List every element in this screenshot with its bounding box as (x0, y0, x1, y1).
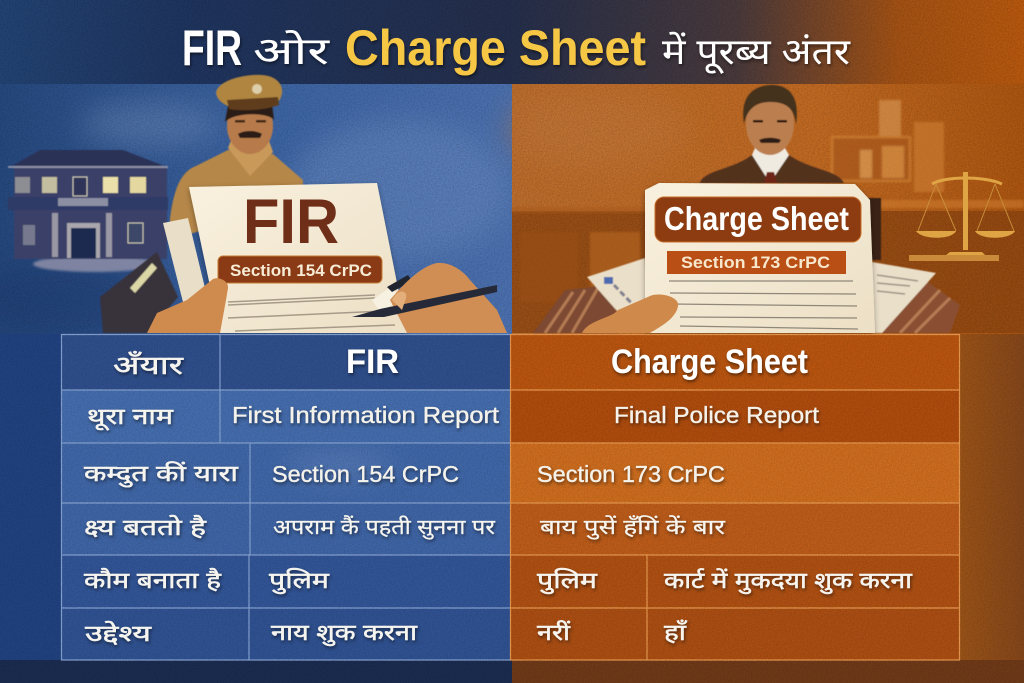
illustration: stacked files right (868, 198, 960, 333)
illustration: stacked files left (533, 258, 648, 333)
row: purpose: हाँ (664, 619, 687, 645)
heading: criteria: अँयार (113, 350, 185, 380)
row: who prepares (84, 567, 912, 595)
title: Charge Sheet (345, 20, 646, 76)
background texture (0, 0, 1024, 334)
row: when made: अपराम कैं पहती सुनना पर (273, 515, 495, 540)
section label Charge Sheet: Section 173 CrPC (681, 253, 830, 272)
row: legal section: Section 173 CrPC (537, 461, 725, 487)
section pill FIR: Section 154 CrPC (230, 261, 372, 280)
title: में पूरब्य अंतर (662, 31, 851, 74)
row: purpose (85, 619, 687, 647)
row: full name (87, 402, 820, 431)
document heading Charge Sheet: Charge Sheet (664, 200, 849, 237)
row: full name: थूरा नाम (87, 404, 174, 431)
row: purpose: नरीं (537, 620, 570, 645)
illustration: scales of justice (909, 172, 1015, 261)
illustration: advocate (700, 85, 844, 183)
row: legal section (84, 461, 725, 488)
section pill FIR (218, 256, 382, 283)
illustration: left hand FIR (147, 278, 228, 333)
document heading FIR: FIR (243, 187, 339, 257)
title band (0, 0, 1024, 84)
illustration: hand holding Charge Sheet (582, 294, 678, 333)
row: who prepares: पुलिम (537, 568, 598, 595)
illustration: police officer (170, 75, 303, 240)
row: legal section: Section 154 CrPC (272, 461, 459, 487)
comparison table: FIR column (61, 334, 510, 660)
row: who prepares: पुलिम (269, 568, 330, 595)
heading: Charge Sheet: Charge Sheet (611, 343, 808, 381)
illustration: Charge Sheet paper (645, 183, 875, 333)
row: purpose: उद्देश्य (85, 620, 153, 646)
illustration: device (100, 252, 178, 333)
table headings (113, 343, 808, 381)
heading: FIR: FIR (346, 343, 399, 381)
row: full name: First Information Report (232, 402, 500, 428)
row: legal section: कम्दुत कीं यारा (84, 461, 238, 488)
row: when made (84, 514, 725, 540)
title: ओर (253, 29, 331, 73)
panel: orange Charge Sheet background (510, 0, 1024, 683)
comparison table: Charge Sheet column (510, 334, 960, 660)
title (182, 20, 851, 76)
row: when made: बाय पुसें हँगिं कें बार (540, 515, 725, 540)
bottom strip (0, 660, 1024, 683)
table texture (0, 334, 1024, 683)
illustration: FIR paper (189, 183, 407, 333)
illustration: police building (8, 150, 168, 272)
illustration: back sheet FIR (163, 218, 205, 310)
panel: blue FIR background (0, 0, 512, 683)
illustration: background office shelves (512, 100, 1024, 302)
row: who prepares: कौम बनाता है (84, 567, 221, 593)
title: FIR (182, 20, 242, 76)
row: when made: क्ष्य बततो है (84, 514, 206, 540)
row: full name: Final Police Report (614, 402, 820, 428)
illustration: right hand with pen (352, 263, 507, 333)
row: who prepares: कार्ट में मुकदया शुक करना (664, 568, 912, 595)
section label Charge Sheet (667, 251, 846, 274)
row: purpose: नाय शुक करना (271, 620, 417, 647)
